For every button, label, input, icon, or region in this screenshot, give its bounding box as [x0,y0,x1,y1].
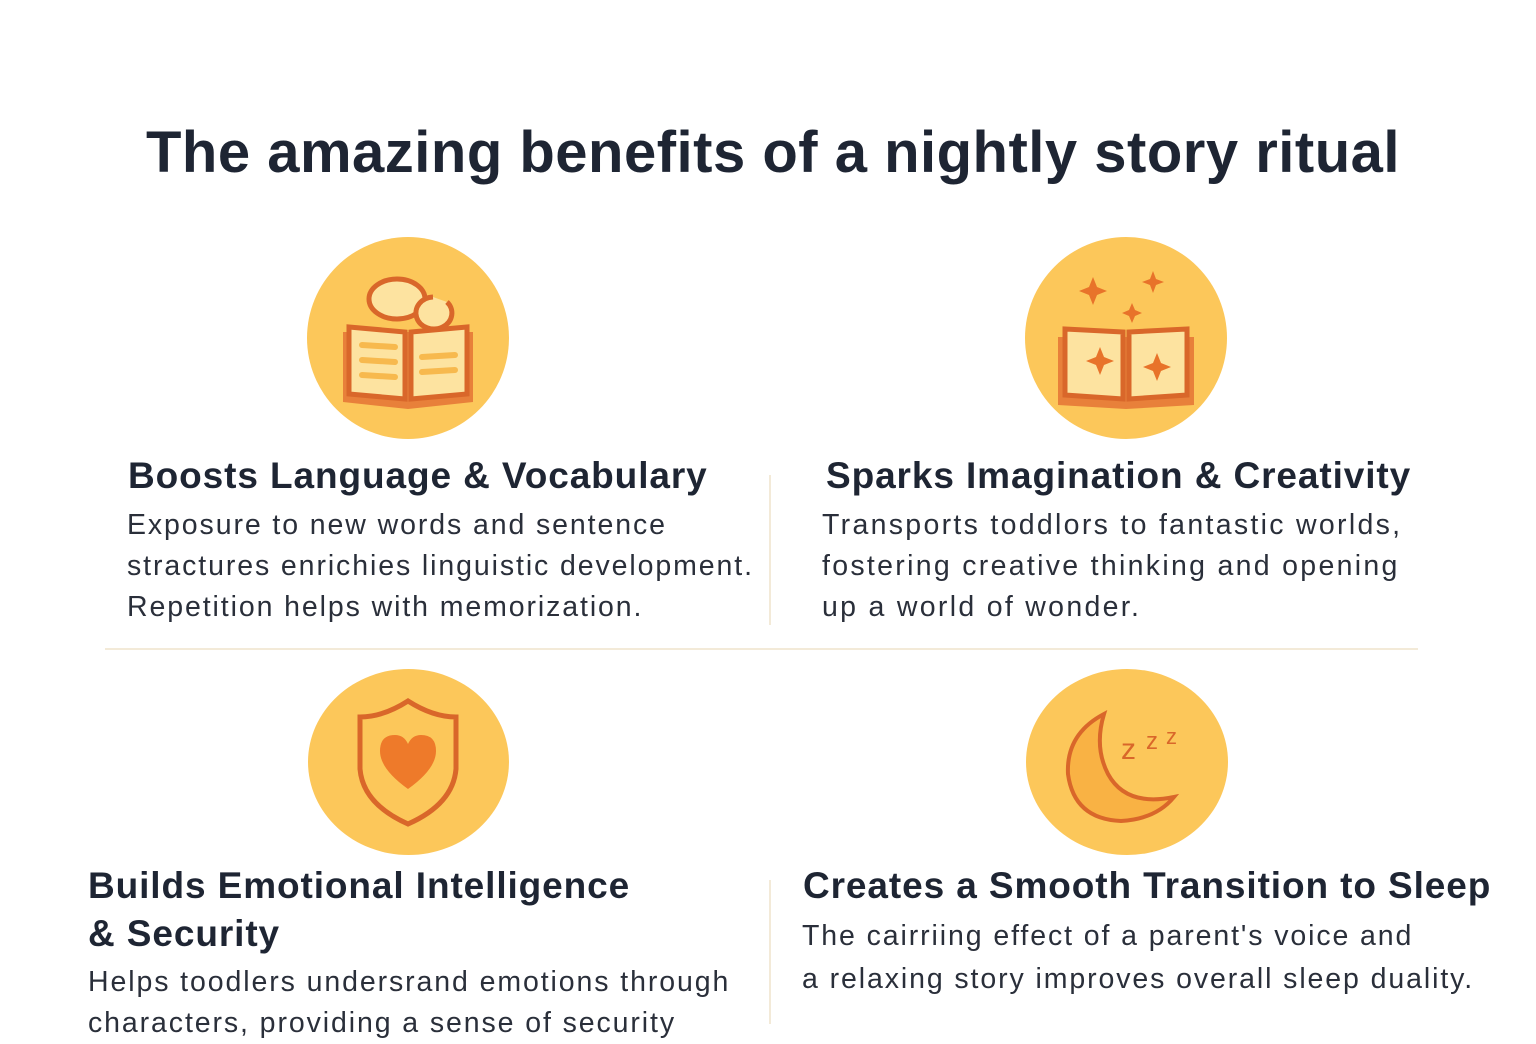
divider vertical bottom [769,880,771,1024]
text: language [127,509,754,623]
text: imagination: Transports toddlors to fantastic worlds, [822,509,1402,541]
icon: book with speech bubbles [307,237,509,439]
title: The amazing benefits of a nightly story ritual [146,120,1400,185]
text: language: Exposure to new words and sentence [127,509,667,541]
text: emotional [88,966,730,1039]
heading: emotional: Builds Emotional Intelligence [88,865,630,906]
text: emotional: Helps toodlers undersrand emotions through [88,966,730,998]
divider horizontal [105,648,1418,650]
icon: shield heart [308,669,509,855]
text: sleep: The cairriing effect of a parent's voice and [802,920,1413,952]
icon: moon zzz [1026,669,1228,855]
heading: language: Boosts Language & Vocabulary [128,455,708,496]
icon: moon zzz: z [1121,733,1136,766]
text: imagination: up a world of wonder. [822,591,1141,623]
text: sleep [802,920,1474,995]
text: sleep: a relaxing story improves overall sleep duality. [802,963,1474,995]
text: imagination [822,509,1402,623]
text: imagination: fostering creative thinking and opening [822,550,1400,582]
icon: moon zzz: z [1166,724,1177,749]
heading: sleep: Creates a Smooth Transition to Sleep [803,865,1491,906]
text: language: stractures enrichies linguistic development. [127,550,754,582]
text: emotional: characters, providing a sense of security [88,1007,676,1039]
icon: book with stars [1025,237,1227,439]
text: language: Repetition helps with memorization. [127,591,643,623]
icon: moon zzz: z [1146,728,1158,755]
heading: emotional [88,865,630,954]
heading: imagination: Sparks Imagination & Creativity [826,455,1411,496]
heading: emotional: & Security [88,913,280,954]
divider vertical top [769,475,771,625]
